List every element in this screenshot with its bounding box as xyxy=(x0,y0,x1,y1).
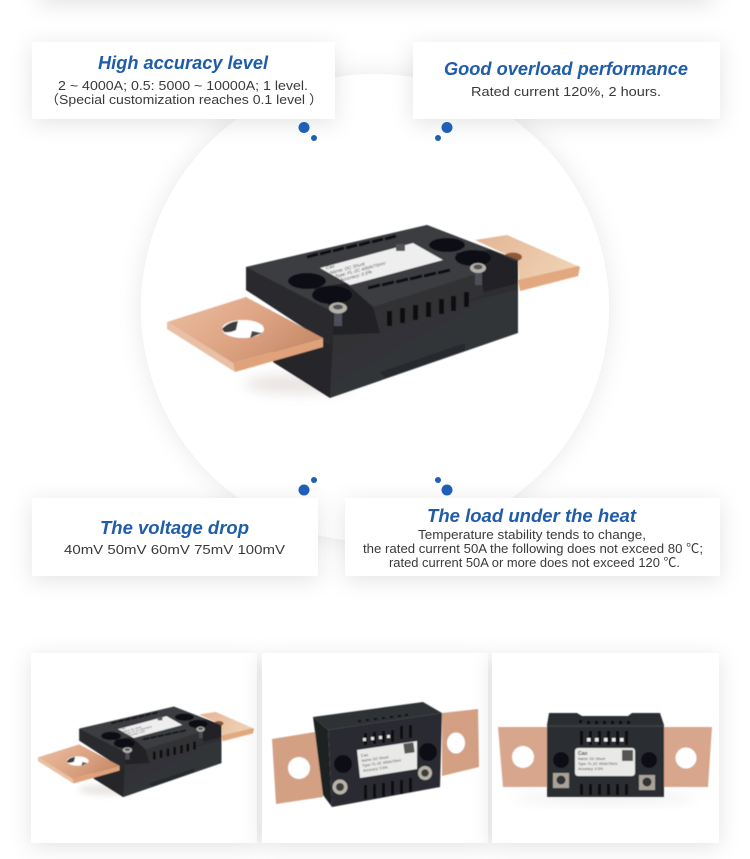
icon: blue dots bottom right xyxy=(435,477,452,496)
product photo: three-quarter: Name: DC Shunt xyxy=(361,755,389,763)
heading: good overload performance: Good overload performance xyxy=(444,59,688,79)
product photo: angled xyxy=(38,707,254,797)
product photo: front xyxy=(498,713,712,803)
product photo: three-quarter: Cao xyxy=(360,752,369,758)
panel: the voltage drop xyxy=(32,498,318,576)
text: accuracy line 2: （Special customization reaches 0.1 level ） xyxy=(45,92,323,107)
product photo: three-quarter xyxy=(272,702,479,807)
panel: high accuracy level xyxy=(32,42,335,119)
text: temperature line 2: the rated current 50A the following does not exceed 80 ℃; xyxy=(363,541,703,556)
product photo: front: Name: DC Shunt xyxy=(578,757,605,761)
product photo: front: Type: FL-2C 400A/75mV xyxy=(578,762,618,766)
heading: high accuracy level: High accuracy level xyxy=(98,53,269,73)
product photo: three-quarter: Accuracy: 0.5% xyxy=(363,765,389,773)
background circle behind product xyxy=(141,74,609,542)
text: temperature line 1: Temperature stability tends to change, xyxy=(418,527,646,542)
icon: blue dots top right xyxy=(435,122,452,141)
main product photo: DC shunt xyxy=(167,225,580,398)
icon: blue dots top left xyxy=(298,122,317,141)
thumbnail panel 1: angled view xyxy=(31,653,257,843)
product photo: three-quarter: Type: FL-2C 400A/75mV xyxy=(362,758,402,768)
text: voltage values: 40mV 50mV 60mV 75mV 100mV xyxy=(64,542,285,557)
panel: the load under the heat xyxy=(345,498,720,576)
thumbnail panel 3: front view xyxy=(492,653,719,843)
icon: blue dots bottom left xyxy=(298,477,317,496)
thumbnail panel 2: three-quarter view xyxy=(262,653,488,843)
text: accuracy line 1: 2 ~ 4000A; 0.5: 5000 ~ 10000A; 1 level. xyxy=(58,78,308,93)
product photo: front: Cao xyxy=(578,751,587,757)
text: rated current: Rated current 120%, 2 hours. xyxy=(471,84,661,99)
heading: the voltage drop: The voltage drop xyxy=(100,518,249,538)
panel: good overload performance xyxy=(413,42,720,119)
text: temperature line 3: rated current 50A or more does not exceed 120 ℃. xyxy=(389,555,680,570)
heading: the load under the heat: The load under the heat xyxy=(427,506,637,526)
product photo: front: Accuracy: 0.5% xyxy=(578,767,604,771)
